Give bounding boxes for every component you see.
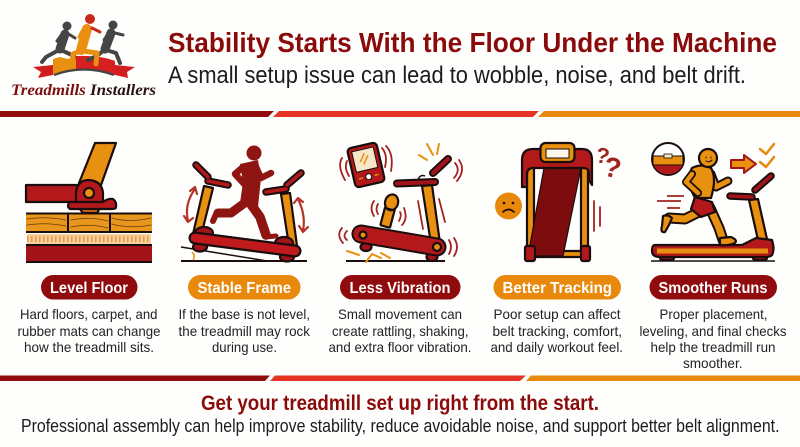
bottle (379, 193, 400, 228)
subtitle: A small setup issue can lead to wobble, noise, and belt drift. (168, 62, 746, 89)
icon: misaligned treadmill belt (495, 142, 624, 261)
logo runner right (88, 20, 123, 63)
text: Better Tracking description: and daily workout feel. (490, 340, 623, 355)
title: Stability Starts With the Floor Under the Machine (168, 27, 777, 58)
text: Less Vibration description: and extra floor vibration. (328, 340, 472, 355)
text: Less Vibration description (328, 307, 472, 355)
pill: Less Vibration: Less Vibration (350, 280, 450, 297)
pill: Better Tracking (494, 275, 621, 300)
logo runner centre (72, 14, 100, 64)
text: Level Floor description: how the treadmill sits. (24, 340, 154, 355)
phone (347, 142, 385, 188)
text: Less Vibration description: create rattling, shaking, (332, 324, 468, 339)
panel: Less Vibration (328, 142, 472, 355)
sparks (347, 144, 439, 262)
panel: Stable Frame (178, 146, 310, 355)
text: Smoother Runs description: smoother. (683, 356, 742, 371)
pill: Smoother Runs (650, 275, 777, 300)
pill: Less Vibration (340, 275, 460, 300)
text: Level Floor description: rubber mats can change (18, 324, 160, 339)
text: Less Vibration description: Small movement can (338, 307, 462, 322)
question marks: ? (601, 151, 624, 185)
icon: treadmill foot on floor layers (26, 143, 152, 262)
pill: Stable Frame: Stable Frame (198, 280, 291, 297)
pill: Smoother Runs: Smoother Runs (658, 280, 768, 297)
question marks (593, 142, 624, 185)
runner (661, 149, 736, 245)
logo: Treadmills Installers (11, 14, 156, 99)
panel: Better Tracking (490, 142, 624, 355)
text: Better Tracking description (490, 307, 623, 355)
speed lines (657, 196, 684, 208)
logo wordmark: Treadmills Installers (11, 82, 156, 99)
text: Smoother Runs description: help the treadmill run (650, 340, 776, 355)
icon: vibrating treadmill with phone and bottle (339, 142, 462, 262)
pill: Better Tracking: Better Tracking (502, 280, 612, 297)
top divider (0, 111, 800, 117)
logo runner left (42, 22, 75, 63)
runner silhouette (213, 146, 276, 237)
text: Level Floor description: Hard floors, carpet, and (20, 307, 158, 322)
text: Stable Frame description: the treadmill may rock (178, 324, 310, 339)
icon: runner on level treadmill (651, 143, 775, 261)
call to action heading: Get your treadmill set up right from the start. (201, 391, 599, 415)
panel: Level Floor (18, 143, 160, 355)
text: Better Tracking description: Poor setup can affect (494, 307, 621, 322)
checkmarks (760, 144, 774, 167)
spirit level badge (652, 143, 684, 175)
text: Stable Frame description: If the base is not level, (178, 307, 310, 322)
text: Stable Frame description (178, 307, 310, 355)
bottom divider (0, 376, 800, 381)
pill: Level Floor (41, 275, 138, 300)
text: Smoother Runs description: Proper placement, (660, 307, 768, 322)
panel: Smoother Runs (640, 143, 787, 371)
text: Better Tracking description: belt tracking, comfort, (492, 324, 622, 339)
sad face (495, 192, 522, 220)
text: Smoother Runs description: leveling, and final checks (640, 324, 787, 339)
pill: Level Floor: Level Floor (50, 280, 128, 297)
arrows: rocking motion (184, 187, 308, 232)
logo banner (33, 56, 135, 78)
arrow: improvement (731, 155, 756, 173)
text: Level Floor description (18, 307, 160, 355)
question marks: ? (593, 142, 612, 169)
vibration marks (339, 146, 462, 256)
pill: Stable Frame (188, 275, 300, 300)
text: Stable Frame description: during use. (212, 340, 277, 355)
text: Smoother Runs description (640, 307, 787, 371)
icon: tilted treadmill with runner (181, 146, 308, 262)
